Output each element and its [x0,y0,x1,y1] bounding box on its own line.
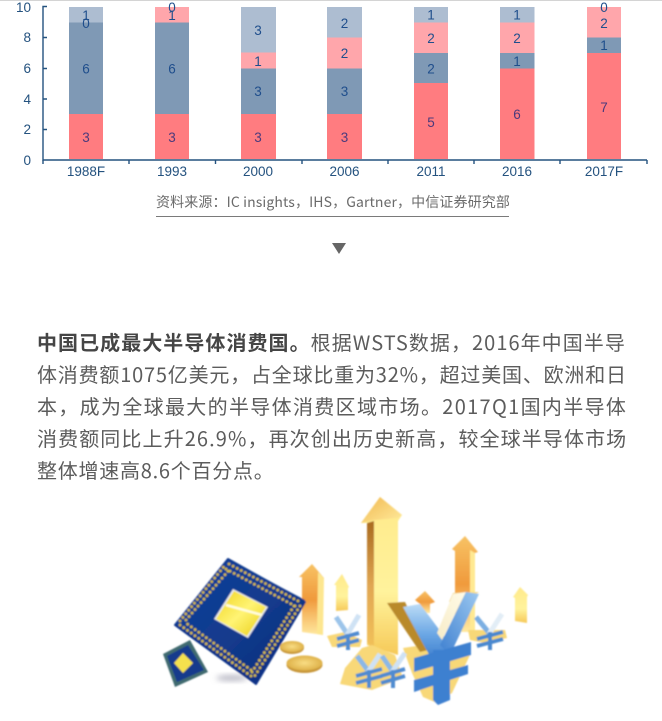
bar 2006: 3 [341,130,348,145]
bar 2011: 5 [427,115,435,130]
bar 2016: 1 [513,8,521,22]
body paragraph: 体消费额1075亿美元，占全球比重为32%，超过美国、欧洲和日 [37,359,627,388]
icon: large yen [387,592,479,705]
icon: small yen center right [381,653,405,688]
bar 1988F: 3 [82,130,90,145]
icon: left small gold arrow [334,574,349,611]
x axis labels: 1988F [67,164,105,179]
bar 2006: 2 [341,16,348,31]
y axis labels: 10 [16,0,31,15]
x axis labels: 2000 [243,164,273,179]
bar 2016 [500,7,534,159]
y axis labels: 0 [23,153,31,168]
stacked bar chart [16,0,648,179]
x axis labels: 2016 [502,164,532,179]
chip shadow [216,675,248,681]
y axis labels: 6 [23,61,31,76]
icon: small yen left [336,615,359,650]
bar 1988F [69,7,103,159]
y axis labels: 2 [23,122,31,137]
x axis labels: 2017F [585,164,623,179]
bar 2016: 1 [513,54,521,69]
body paragraph [37,327,627,484]
bar 1993: 3 [168,130,176,145]
bar 2017F: 7 [600,100,608,115]
x axis labels: 1993 [157,164,187,179]
icon: small yen center left [356,654,382,688]
x axis labels: 2011 [416,164,446,179]
bar 2000: 3 [254,130,262,145]
axes [43,6,647,164]
bar 2011 [414,7,448,159]
icon: gold rubble pile [327,630,507,703]
icon: left orange arrow [299,564,324,635]
bar 2006: 2 [341,46,348,61]
source note: 资料来源：IC insights，IHS，Gartner，中信证券研究部 [156,192,510,212]
icon: gold coin back [280,641,304,654]
icon: right orange arrow [452,536,478,632]
body paragraph: 中国已成最大半导体消费国。根据WSTS数据，2016年中国半导 [37,327,626,356]
bar 2016: 6 [513,107,521,122]
bar 2017F: 0 [600,0,608,15]
x axis labels: 2006 [329,164,360,179]
bar 2000: 3 [254,84,262,99]
icon: down triangle [332,243,346,254]
icon: small middle orange arrow [415,591,435,613]
bar 1993 [155,0,189,159]
bar 2006: 3 [341,84,348,99]
icon: small yen right [476,614,503,650]
x axis labels [67,164,623,179]
icon: far right small arrow [513,587,528,623]
bar 1993: 6 [168,62,176,76]
bar 2017F: 1 [600,38,608,53]
body paragraph: 本，成为全球最大的半导体消费区域市场。2017Q1国内半导体 [37,391,627,420]
bar 2011: 1 [427,8,435,22]
icon: gold coin front [286,656,322,673]
body paragraph: 整体增速高8.6个百分点。 [37,455,275,484]
bar 2017F [587,0,621,159]
y axis labels: 4 [23,92,31,107]
bar 2006 [327,7,362,159]
bar 1988F: 6 [82,62,90,76]
bar 1988F: 1 [82,8,90,23]
bar 1988F: 0 [82,16,90,31]
body paragraph: 消费额同比上升26.9%，再次创出历史新高，较全球半导体市场 [37,423,627,452]
bar 2016: 2 [513,31,521,46]
bar 2000: 3 [254,23,262,38]
bar 2011: 2 [427,31,435,46]
bar 1993: 0 [168,0,176,15]
y axis labels: 8 [23,30,31,45]
bar 2000 [241,7,276,159]
bar 1993: 1 [168,8,176,23]
y axis labels [16,0,31,168]
bar 2011: 2 [427,62,435,76]
icon: large gold arrow [361,497,402,655]
icon: small chip [163,640,208,687]
icon: large chip [175,559,305,684]
bar 2000: 1 [254,54,262,69]
bar 2017F: 2 [600,16,608,31]
